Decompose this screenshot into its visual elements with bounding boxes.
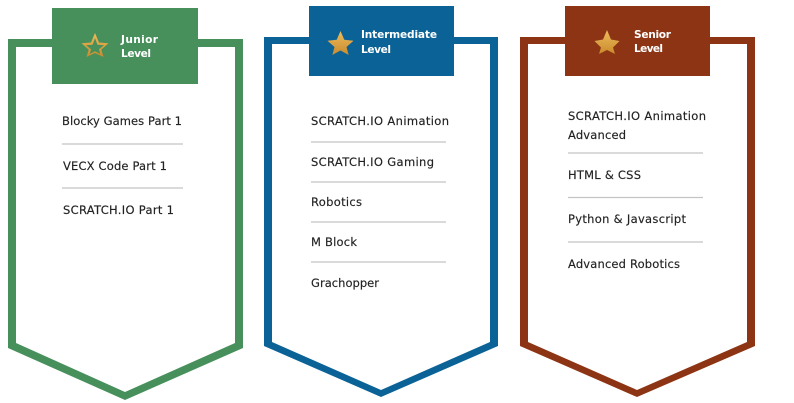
list: intermediate courses: Robotics: [311, 195, 362, 209]
heading: junior level: Junior: [120, 34, 159, 46]
header: senior level: [565, 6, 710, 76]
panel: intermediate level: [264, 6, 498, 397]
header: junior level: [52, 8, 198, 84]
heading: intermediate level: Intermediate: [361, 29, 437, 41]
list: junior courses: VECX Code Part 1: [63, 159, 167, 173]
list: intermediate courses: M Block: [311, 235, 357, 249]
list: intermediate courses: SCRATCH.IO Animation: [311, 114, 449, 128]
list: intermediate courses: [311, 114, 449, 290]
list: senior courses: Advanced: [568, 128, 626, 142]
list: junior courses: SCRATCH.IO Part 1: [63, 203, 174, 217]
icon: filled star: [594, 30, 620, 54]
heading: senior level: Level: [634, 43, 663, 55]
list: intermediate courses: Grachopper: [311, 276, 379, 290]
shield outline: junior: [8, 39, 243, 400]
list: senior courses: SCRATCH.IO Animation: [568, 109, 706, 123]
list: junior courses: Blocky Games Part 1: [62, 114, 182, 128]
icon: outline star: [82, 33, 108, 57]
heading: senior level: Senior: [634, 29, 672, 41]
list: junior courses: [62, 114, 183, 217]
shield outline: senior: [520, 37, 755, 397]
header: intermediate level: [309, 6, 454, 76]
list: senior courses: [568, 109, 706, 271]
shield outline: intermediate: [264, 37, 498, 397]
panel: senior level: [520, 6, 755, 397]
heading: junior level: Level: [121, 48, 151, 60]
icon: filled star: [328, 31, 354, 55]
list: senior courses: Python & Javascript: [568, 212, 686, 226]
list: senior courses: Advanced Robotics: [568, 257, 680, 271]
panel: junior level: [8, 8, 243, 400]
list: senior courses: HTML & CSS: [568, 168, 641, 182]
list: intermediate courses: SCRATCH.IO Gaming: [311, 155, 434, 169]
heading: intermediate level: Level: [361, 44, 391, 56]
